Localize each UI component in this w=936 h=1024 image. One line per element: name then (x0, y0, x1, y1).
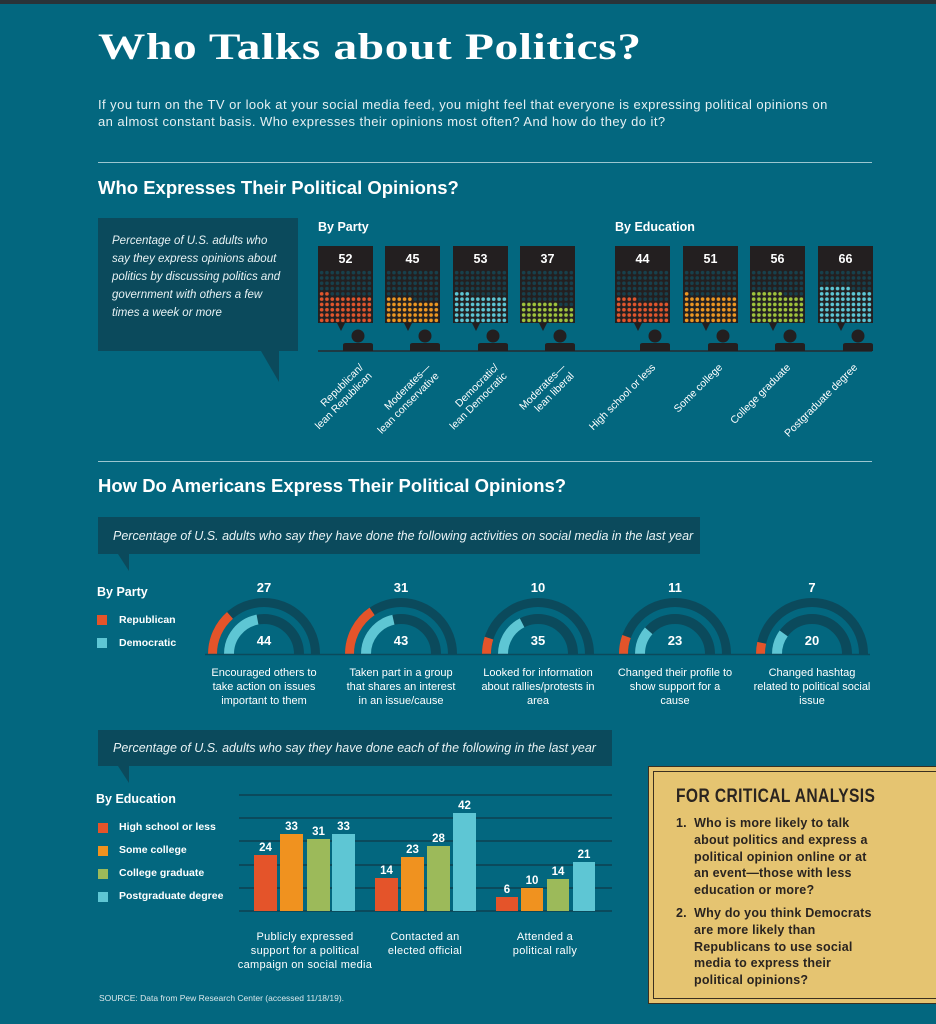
gauge: group (350, 580, 452, 654)
bar chart (239, 794, 612, 912)
banner: last year: Percentage of U.S. adults who say they have done each of the following in the last year (113, 741, 596, 755)
title: Who Talks about Politics? (98, 27, 642, 68)
rotated category labels: Postgraduate degree (782, 362, 860, 439)
gauge: group: 43 (394, 633, 408, 648)
text: Contacted an elected official (388, 931, 462, 957)
dot box: Republican 52 (318, 246, 373, 351)
source: SOURCE: Data from Pew Research Center (accessed 11/18/19). (99, 993, 344, 1003)
legend: by education: Some college (119, 844, 187, 856)
legend: by party (97, 585, 176, 649)
rotated category labels (304, 361, 860, 439)
bar chart: 14 (380, 865, 393, 877)
heading: who expresses: Who Expresses Their Political Opinions? (98, 177, 459, 198)
label: by education: By Education (615, 220, 695, 234)
legend: by party: Republican (119, 614, 176, 626)
callout: percentage definition: Percentage of U.S. adults who say they express opinions about politics by discussing politics and government with others a few times a week or more (112, 235, 280, 319)
bar chart: 24 (259, 842, 272, 854)
dot box: Democratic 53 (453, 246, 508, 351)
gauge charts (205, 580, 870, 656)
text: Looked for information about rallies/protests in area (481, 667, 595, 707)
bar chart: 23 (406, 844, 419, 856)
rotated category labels: Moderates— (382, 361, 433, 413)
panel: for critical analysis: 2. Why do you think Democrats are more likely than Republicans to use social media to express their political opinions? (676, 906, 872, 987)
gauge: group: 31 (394, 580, 408, 595)
legend: by party: Democratic (119, 637, 176, 649)
dot box: Moderate conservative 45: 45 (406, 252, 419, 266)
gauge: rallies: 35 (531, 633, 545, 648)
rotated category labels: lean Republican (313, 370, 375, 432)
label: by party: By Party (318, 220, 369, 234)
dot box: Moderate liberal 37 (520, 246, 575, 351)
gauge labels: Encouraged others to take action on issues important to them (211, 667, 317, 707)
bar chart: 14 (552, 866, 565, 878)
bar labels: Publicly expressed support for a political campaign on social media (238, 931, 372, 971)
rotated category labels: lean liberal (532, 370, 577, 415)
heading: how do americans: How Do Americans Express Their Political Opinions? (98, 475, 566, 496)
legend: by education: College graduate (119, 867, 204, 879)
panel: for critical analysis: 1. Who is more likely to talk about politics and express a political opinion online or at an event—those with less education or more? (676, 816, 868, 897)
gauge: profile: 23 (668, 633, 682, 648)
rotated category labels: lean conservative (375, 370, 442, 436)
gauge: encouraged: 44 (257, 633, 272, 648)
bar chart: 6 (504, 884, 510, 896)
dot box: Postgraduate 66 (818, 246, 873, 351)
bar chart: 28 (432, 833, 445, 845)
gauge: hashtag (760, 580, 864, 654)
rotated category labels: Republican/ (318, 362, 366, 409)
bar chart: 33 (337, 821, 350, 833)
dot charts (313, 246, 873, 439)
gauge: rallies (486, 580, 590, 654)
intro text: If you turn on the TV or look at your social media feed, you might feel that everyone is expressing political opinions on an almost constant basis. Who expresses their opinions most often? And how do they do it? (98, 97, 828, 129)
text: Changed their profile to show support for a cause (618, 667, 732, 707)
dot box: High school 44: 44 (636, 252, 649, 266)
top bar (0, 0, 936, 4)
dot box: Some college 51 (683, 246, 738, 351)
rotated category labels: High school or less (587, 362, 658, 433)
legend: by education: High school or less (119, 821, 216, 833)
gauge: encouraged: 27 (257, 580, 271, 595)
bar chart: 21 (578, 849, 591, 861)
text: Changed hashtag related to political social issue (754, 667, 870, 707)
dot box: High school 44 (615, 246, 670, 351)
bar chart: 33 (285, 821, 298, 833)
rotated category labels: lean Democratic (447, 370, 510, 432)
legend: by education (96, 792, 224, 902)
text: Taken part in a group that shares an interest in an issue/cause (347, 667, 455, 707)
dot box: Moderate conservative 45 (385, 246, 440, 351)
dot box: College graduate 56: 56 (771, 252, 784, 266)
gauge: encouraged (212, 580, 316, 654)
bar chart: 10 (526, 875, 538, 887)
rotated category labels: Moderates— (517, 361, 568, 413)
banner: social media: Percentage of U.S. adults who say they have done the following activities on social media in the last year (113, 529, 693, 543)
banner: social media (98, 517, 700, 571)
gauge: profile: 11 (668, 580, 682, 595)
rotated category labels: College graduate (728, 362, 793, 427)
dot box: College graduate 56 (750, 246, 805, 351)
dot box: Democratic 53: 53 (474, 252, 487, 266)
dot box: Postgraduate 66: 66 (839, 252, 852, 266)
gauge: hashtag: 7 (808, 580, 816, 595)
legend: by party: By Party (97, 585, 148, 599)
legend: by education: Postgraduate degree (119, 890, 223, 902)
callout: percentage definition (98, 218, 298, 382)
panel: for critical analysis (648, 766, 936, 1004)
rotated category labels: Democratic/ (453, 362, 501, 410)
text: Attended a political rally (513, 931, 577, 957)
panel: for critical analysis: FOR CRITICAL ANALYSIS (676, 786, 875, 807)
bar chart: 42 (458, 800, 471, 812)
dot box: Republican 52: 52 (339, 252, 352, 266)
gauge: hashtag: 20 (805, 633, 819, 648)
gauge: profile (623, 580, 726, 654)
dot box: Some college 51: 51 (704, 252, 717, 266)
legend: by education: By Education (96, 792, 176, 806)
dot box: Moderate liberal 37: 37 (541, 252, 554, 266)
bar chart: 31 (312, 826, 325, 838)
banner: last year (98, 730, 612, 783)
gauge: rallies: 10 (531, 580, 545, 595)
rotated category labels: Some college (672, 362, 725, 415)
